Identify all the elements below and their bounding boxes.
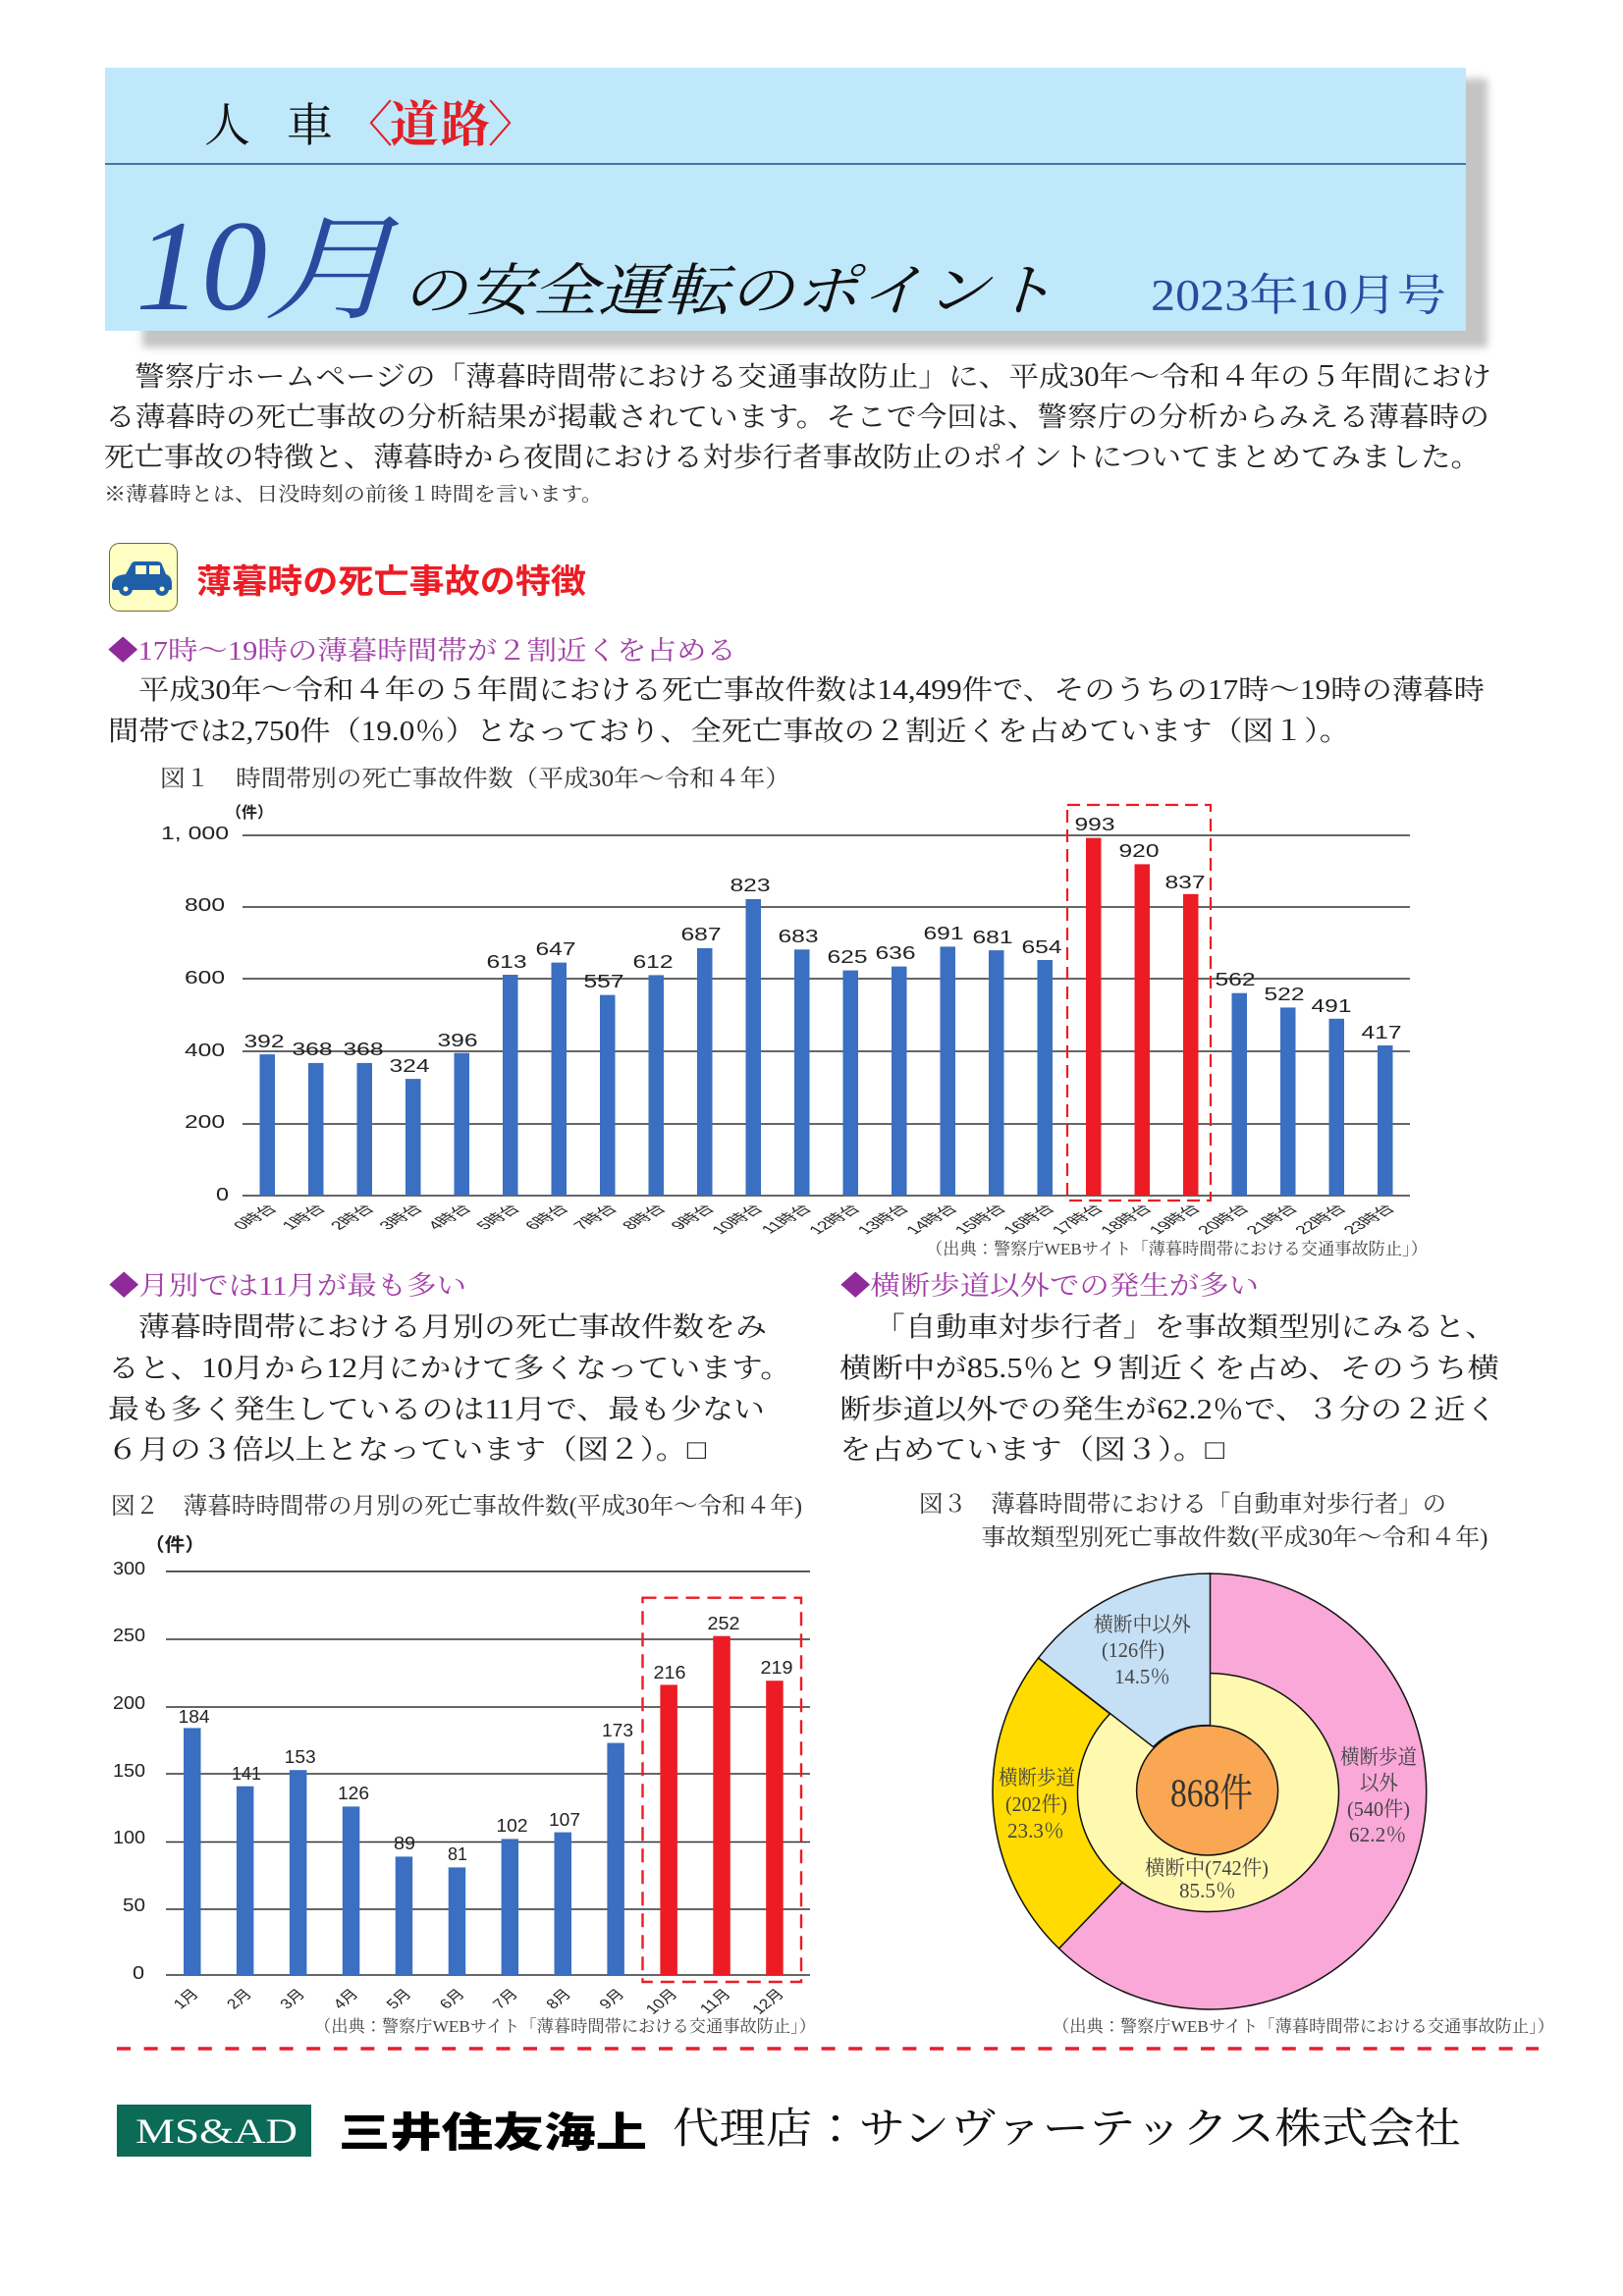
value labels: 562 (1216, 970, 1255, 989)
kicker: person, car, road (204, 97, 537, 152)
x axis labels: 3月 (277, 1987, 309, 2012)
value labels: 368 (344, 1040, 383, 1059)
intro text: 警察庁ホームページの「薄暮時間帯における交通事故防止」に、平成30年～令和４年の５年間におけ (135, 361, 1491, 393)
value labels: 636 (876, 943, 915, 963)
x axis labels: 1時台 (278, 1201, 330, 1232)
y axis labels: （件） (144, 1534, 205, 1556)
y axis labels: 50 (123, 1896, 145, 1915)
dashed highlight box (642, 1598, 801, 1982)
label: crosswalk: 横断歩道 (999, 1766, 1075, 1789)
x axis labels (171, 1987, 787, 2017)
figure 1 caption: 図１ 時間帯別の死亡事故件数（平成30年～令和４年） (160, 766, 790, 792)
value labels: 920 (1119, 841, 1159, 861)
y axis labels: 150 (113, 1761, 145, 1781)
value labels: 823 (730, 876, 770, 895)
subheading: 17-19 time band: ◆17時～19時の薄暮時間帯が２割近くを占める (108, 636, 736, 666)
y axis labels (161, 804, 273, 1204)
y axis labels: 200 (185, 1112, 225, 1132)
centre label: 868件 (1170, 1771, 1253, 1815)
figure 2 source: （出典：警察庁WEBサイト「薄暮時間帯における交通事故防止」） (314, 2017, 816, 2036)
y axis labels: 1, 000 (161, 824, 229, 843)
x axis labels: 12時台 (804, 1201, 864, 1237)
title: October safe driving points: 月 (263, 206, 400, 335)
x axis labels: 12月 (749, 1987, 787, 2017)
x axis labels: 8時台 (618, 1201, 670, 1232)
label: crosswalk (999, 1766, 1075, 1842)
x axis labels: 13時台 (853, 1201, 913, 1237)
subheading: November: ◆月別では11月が最も多い (109, 1271, 466, 1301)
y axis labels: 0 (216, 1185, 229, 1204)
figure 3 caption (919, 1491, 1488, 1551)
value labels: 252 (707, 1614, 740, 1633)
value labels: 681 (972, 928, 1013, 947)
label: outside crosswalk: 横断歩道 (1340, 1745, 1417, 1769)
blue bars (259, 899, 1392, 1196)
dashed highlight box (1067, 805, 1211, 1201)
figure 3 source: （出典：警察庁WEBサイト「薄暮時間帯における交通事故防止」） (1053, 2017, 1554, 2036)
subheading: outside crosswalk: ◆横断歩道以外での発生が多い (840, 1271, 1259, 1301)
y axis labels (113, 1534, 205, 1983)
figure 3 caption: 図３ 薄暮時間帯における「自動車対歩行者」の (919, 1491, 1446, 1518)
x axis labels: 10時台 (707, 1201, 767, 1237)
label: crosswalk: 23.3％ (1007, 1819, 1064, 1842)
x axis labels: 7時台 (569, 1201, 622, 1232)
x axis labels: 2月 (224, 1987, 255, 2012)
label: outside crosswalk: 以外 (1360, 1771, 1398, 1794)
value labels (243, 815, 1402, 1076)
logo: MS&AD: MS&AD (135, 2111, 298, 2151)
x axis labels: 9時台 (667, 1201, 719, 1232)
footer (117, 2105, 1461, 2157)
value labels: 654 (1021, 937, 1062, 957)
right column: crossing text: 横断中が85.5％と９割近くを占め、そのうち横 (839, 1353, 1499, 1384)
left column: monthly text: ると、10月から12月にかけて多くなっています。 (108, 1353, 791, 1384)
value labels: 396 (438, 1031, 477, 1050)
value labels: 491 (1312, 996, 1351, 1016)
left column: monthly text: 薄暮時間帯における月別の死亡事故件数をみ (138, 1311, 767, 1343)
right column: crossing text (839, 1271, 1499, 1466)
kicker: person, car, road: 車 (287, 101, 333, 152)
value labels: 687 (681, 925, 721, 944)
value labels: 647 (536, 939, 575, 959)
value labels: 993 (1074, 815, 1115, 834)
x axis labels: 10月 (643, 1987, 681, 2017)
ring: crossing (1078, 1673, 1339, 1912)
donut chart: accident types (993, 1574, 1427, 2009)
x axis labels: 18時台 (1096, 1201, 1156, 1237)
intro text (104, 361, 1491, 506)
body text: time band: 平成30年～令和４年の５年間における死亡事故件数は14,499件で、そのうちの17時～19時の薄暮時 (138, 674, 1485, 706)
title: October safe driving points (135, 193, 1055, 338)
value labels: 107 (549, 1810, 580, 1830)
header banner (105, 68, 1488, 347)
x axis labels: 20時台 (1193, 1201, 1253, 1237)
value labels (179, 1614, 793, 1864)
bar chart: deaths by hour (161, 804, 1410, 1237)
centre total (1137, 1726, 1278, 1855)
y axis labels: 400 (185, 1041, 225, 1060)
label: crosswalk: (202件) (1005, 1792, 1067, 1816)
segment: other than crossing (1039, 1574, 1210, 1747)
title: October safe driving points: 10 (135, 193, 267, 338)
segment: outside crosswalk (1058, 1574, 1427, 2009)
x axis labels: 2時台 (326, 1201, 378, 1232)
label: other than crossing: (126件) (1102, 1638, 1164, 1662)
value labels: 126 (338, 1784, 369, 1803)
x axis labels: 11時台 (757, 1201, 816, 1236)
x axis labels: 11月 (697, 1987, 734, 2017)
y axis labels: 300 (113, 1559, 145, 1578)
intro text: ※薄暮時とは、日没時刻の前後１時間を言います。 (104, 483, 603, 506)
company name: 三井住友海上 (339, 2109, 647, 2156)
value labels: 219 (760, 1658, 793, 1678)
value labels: 141 (232, 1764, 261, 1784)
icon: car badge (110, 544, 177, 611)
value labels: 522 (1265, 985, 1304, 1004)
value labels: 81 (448, 1844, 467, 1864)
bar chart: deaths by month (113, 1534, 810, 2017)
value labels: 837 (1164, 873, 1206, 892)
x axis labels: 4時台 (423, 1201, 475, 1232)
issue date: 2023年10月号 (1151, 271, 1446, 320)
right column: crossing text: 「自動車対歩行者」を事故類型別にみると、 (874, 1311, 1496, 1343)
red bars: dusk hours (1086, 838, 1198, 1196)
value labels: 368 (293, 1040, 332, 1059)
value labels: 184 (179, 1707, 210, 1727)
value labels: 392 (243, 1032, 285, 1051)
x axis labels: 3時台 (375, 1201, 427, 1232)
x axis labels: 5時台 (472, 1201, 524, 1232)
value labels: 173 (602, 1721, 633, 1740)
value labels: 102 (497, 1816, 528, 1836)
left column: monthly text (107, 1271, 791, 1466)
label: outside crosswalk (1340, 1745, 1417, 1846)
x axis labels: 8月 (543, 1987, 575, 2012)
body text: time band (108, 674, 1485, 747)
x axis labels: 22時台 (1290, 1201, 1350, 1237)
figure 2 caption: 図２ 薄暮時時間帯の月別の死亡事故件数(平成30年～令和４年) (111, 1493, 802, 1520)
x axis labels: 19時台 (1145, 1201, 1205, 1237)
y axis labels: 0 (133, 1963, 144, 1983)
right column: crossing text: を占めています（図３）。□ (839, 1434, 1224, 1466)
label: crossing: 横断中(742件) (1145, 1856, 1269, 1880)
x axis labels: 15時台 (950, 1201, 1010, 1237)
value labels: 89 (394, 1834, 415, 1853)
value labels: 153 (285, 1747, 316, 1767)
agency name: 代理店：サンヴァーテックス株式会社 (673, 2107, 1461, 2153)
x axis labels: 6時台 (520, 1201, 572, 1232)
label: crossing (1145, 1856, 1269, 1902)
intro text: る薄暮時の死亡事故の分析結果が掲載されています。そこで今回は、警察庁の分析からみえる薄暮時の (105, 401, 1489, 433)
x axis labels: 21時台 (1242, 1201, 1302, 1237)
value labels: 417 (1361, 1023, 1402, 1042)
figure 1 source: （出典：警察庁WEBサイト「薄暮時間帯における交通事故防止」） (926, 1240, 1428, 1258)
figure 3 caption: 事故類型別死亡事故件数(平成30年～令和４年) (982, 1524, 1488, 1551)
x axis labels: 5月 (384, 1987, 415, 2012)
value labels: 216 (654, 1663, 685, 1682)
y axis labels: 600 (185, 968, 225, 988)
y axis labels: （件） (226, 804, 273, 822)
value labels: 691 (923, 924, 964, 943)
x axis labels: 1月 (171, 1987, 202, 2012)
value labels: 324 (389, 1056, 430, 1076)
x axis labels: 7月 (490, 1987, 521, 2012)
label: outside crosswalk: 62.2％ (1349, 1823, 1406, 1846)
x axis labels: 17時台 (1048, 1201, 1108, 1237)
right column: crossing text: 断歩道以外での発生が62.2％で、３分の２近く (839, 1394, 1497, 1425)
value labels: 613 (487, 952, 526, 972)
label: crossing: 85.5％ (1179, 1879, 1236, 1902)
x axis labels: 14時台 (901, 1201, 961, 1237)
value labels: 557 (583, 972, 624, 991)
value labels: 625 (827, 947, 868, 967)
kicker: person, car, road: 人 (204, 101, 250, 152)
label: other than crossing: 14.5％ (1114, 1665, 1170, 1688)
x axis labels: 4月 (330, 1987, 362, 2012)
intro text: 死亡事故の特徴と、薄暮時から夜間における対歩行者事故防止のポイントについてまとめてみました。 (104, 442, 1481, 473)
label: outside crosswalk: (540件) (1347, 1797, 1410, 1821)
blue bars (184, 1728, 624, 1975)
y axis labels: 200 (113, 1693, 145, 1713)
logo: MS&AD (117, 2105, 311, 2157)
x axis labels: 9月 (596, 1987, 628, 2012)
value labels: 612 (632, 952, 674, 972)
y axis labels: 100 (113, 1828, 145, 1847)
segment: crosswalk (993, 1658, 1210, 1949)
left column: monthly text: ６月の３倍以上となっています（図２）。□ (107, 1434, 706, 1466)
x axis labels: 6月 (437, 1987, 468, 2012)
y axis labels: 250 (113, 1626, 145, 1645)
value labels: 683 (778, 927, 819, 946)
label: other than crossing (1094, 1613, 1191, 1688)
x axis labels: 23時台 (1339, 1201, 1399, 1237)
section heading: 薄暮時の死亡事故の特徴 (196, 563, 586, 601)
x axis labels: 16時台 (999, 1201, 1058, 1237)
left column: monthly text: 最も多く発生しているのは11月で、最も少ない (108, 1394, 765, 1425)
x axis labels: 0時台 (229, 1201, 281, 1232)
x axis labels (229, 1201, 1399, 1237)
title: October safe driving points: の安全運転のポイント (402, 259, 1055, 323)
body text: time band: 間帯では2,750件（19.0％）となっており、全死亡事故の２割近くを占めています（図１）。 (108, 716, 1350, 747)
y axis labels: 800 (185, 895, 225, 915)
label: other than crossing: 横断中以外 (1094, 1613, 1191, 1636)
red bars: Oct to Dec (660, 1636, 784, 1975)
kicker: person, car, road: 〈道路〉 (344, 97, 537, 152)
